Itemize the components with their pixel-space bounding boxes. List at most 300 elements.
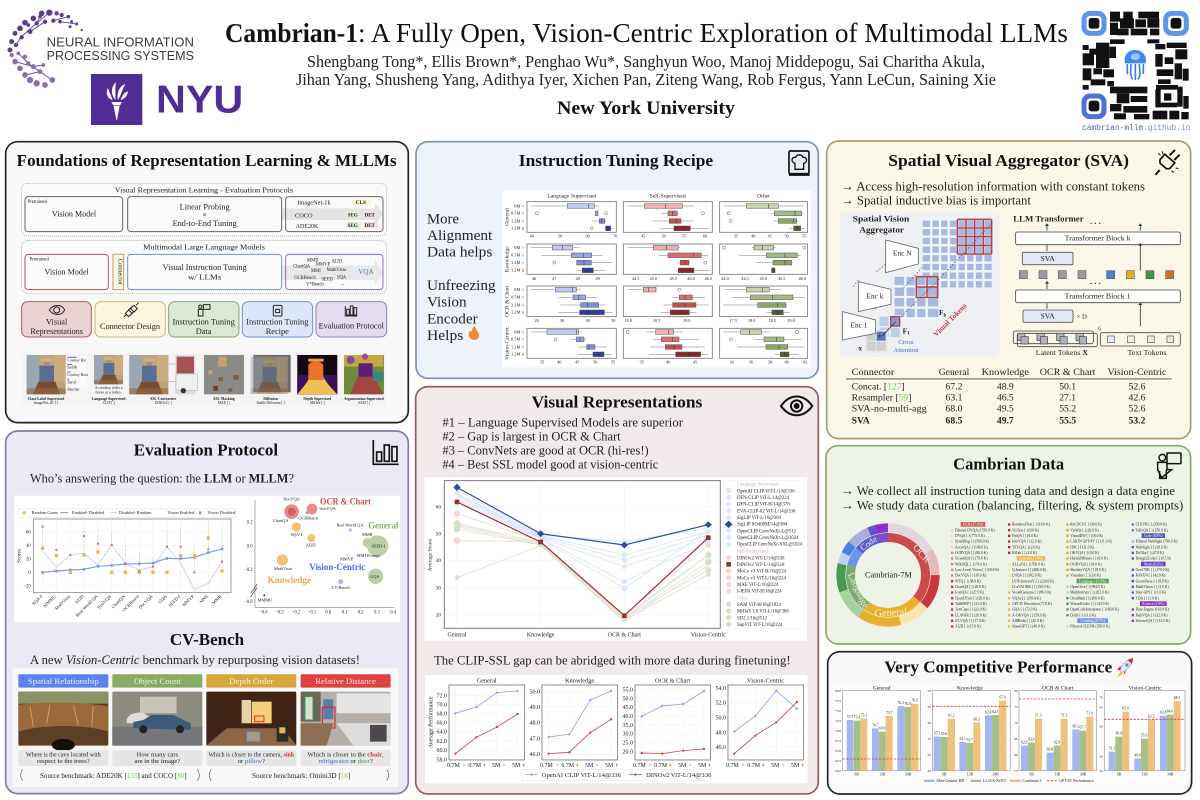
line charts: fine-tuning data scale: 0.7M xyxy=(654,763,668,769)
card: depth order: Which is closer to the camera, sink xyxy=(208,751,295,758)
line chart: average score by category: 20 xyxy=(436,612,441,618)
image strip: representation methods: Cowboy Hat xyxy=(67,358,86,362)
box plot grid: Self-Supervised xyxy=(650,192,686,199)
line chart: scores: MMVP xyxy=(182,594,196,608)
line chart: scores: MathVista xyxy=(54,595,72,612)
scatter plot: benchmarks: 0.2 xyxy=(247,521,253,526)
scatter plot: benchmarks: −0.8 xyxy=(244,600,253,605)
box plot grid: 1.2M xyxy=(511,268,520,273)
bar charts: performance by scale: 56.4 xyxy=(1115,732,1122,736)
diagram: spatial vision aggregator: k xyxy=(943,313,946,318)
legend column: general: InfoVQA [ ] (2.0 K) xyxy=(1012,540,1042,544)
box plot grid: 45.0 xyxy=(650,276,657,281)
box plot grid: 50 xyxy=(784,234,789,239)
text: question: Who’s answering the question: the LLM or MLLM? xyxy=(30,471,294,486)
text: cambrian bullets xyxy=(841,484,1183,512)
card: visual representations xyxy=(22,302,91,337)
icon: jellyfish xyxy=(1120,49,1150,80)
diagram: evaluation protocols: DET xyxy=(365,213,376,218)
chart legend: GPT-4V Performance xyxy=(1059,778,1094,783)
legend column: language and counting xyxy=(1066,523,1120,629)
scatter plot: benchmarks: MMB xyxy=(362,532,373,537)
legend column: general: General (21.9%) xyxy=(1019,557,1044,561)
bar charts: performance by scale: 60.2 xyxy=(973,717,980,721)
diagram: multimodal LLMs: Visual Instruction Tuning xyxy=(163,263,247,272)
icon: eye xyxy=(49,305,65,314)
panel: spatial visual aggregator xyxy=(827,141,1191,439)
scatter plot: benchmarks: 0.0 xyxy=(247,544,253,549)
legend column: OCR: DVQA [ ] (775.0 K) xyxy=(955,534,986,538)
heading: foundations: Foundations of Representation Learning & MLLMs xyxy=(17,151,397,170)
box plot grid: 45 xyxy=(641,234,645,239)
scatter plot: benchmarks: −0.2 xyxy=(244,568,253,573)
bar charts: performance by scale: 6B xyxy=(1030,772,1034,776)
line chart: scores: Vision Enabled xyxy=(167,510,195,515)
box plot grid: Other xyxy=(757,193,770,199)
bar charts: performance by scale: 76.3 xyxy=(897,701,904,705)
bar charts: performance by scale: 75.0 xyxy=(835,709,841,713)
line chart: scores: Enabled−Disabled xyxy=(72,510,105,515)
legend column: OCR: ScreenQA [ ] (79.0 K) xyxy=(955,557,988,561)
chart legend: MAE ViT-L/16@224 xyxy=(737,583,779,588)
diagram: evaluation protocols: SEG xyxy=(348,224,358,229)
diagram: multimodal LLMs: MMI xyxy=(311,269,321,274)
bar charts: performance by scale: 55.9 xyxy=(1141,734,1148,738)
card: instruction tuning recipe xyxy=(242,302,313,337)
diagram: multimodal LLMs: MMB xyxy=(307,259,318,264)
icon: plug xyxy=(1156,150,1180,175)
scatter plot: benchmarks: Knowledge xyxy=(268,575,311,585)
image strip: representation methods: MiDaS [ ] xyxy=(310,401,325,405)
heading: CV-Bench: CV-Bench xyxy=(170,630,244,649)
chart legend: SigLIP SO400M/14@384 xyxy=(737,523,788,528)
legend column: general: ShareGPT [ ] (40.0 K) xyxy=(1012,625,1045,629)
line chart: scores: −20 xyxy=(23,585,31,590)
legend column: OCR xyxy=(951,522,1000,629)
card: object count: Object Count xyxy=(134,676,181,686)
scatter plot: benchmarks: General xyxy=(368,521,399,531)
bar charts: performance by scale: 71.3 xyxy=(1061,714,1067,718)
box plot grid: 47 xyxy=(552,276,557,281)
scatter plot: benchmarks: OCRBench xyxy=(298,515,319,520)
legend column: code, math, science: DaTikz [ ] (47.0 K) xyxy=(1136,551,1165,555)
legend column: general xyxy=(1008,523,1055,629)
table: connector comparison: 63.1 xyxy=(946,392,963,403)
bar charts: performance by scale: 34B xyxy=(905,772,912,776)
card: visual representations: Representations xyxy=(30,327,83,336)
box plot grid: Vision-Centric xyxy=(505,326,511,360)
line chart: scores: GQA xyxy=(158,594,169,605)
box plot grid: 30 xyxy=(560,318,564,323)
scatter plot: benchmarks: SEED-I xyxy=(371,543,386,548)
diagram: LLM transformer: × D xyxy=(1077,313,1087,320)
chart: data donut xyxy=(841,528,935,622)
table: connector comparison: 50.1 xyxy=(1059,381,1076,392)
chart legend: SupViT ViT-L/16@224 xyxy=(737,623,783,628)
box plot grid xyxy=(503,191,811,367)
legend column: OCR: ArxivQA [ ] (100.0 K) xyxy=(955,545,989,549)
language boxes xyxy=(547,204,611,357)
table: connector comparison: OCR & Chart xyxy=(1040,367,1096,378)
legend column: general: ALLaVA [ ] (700.0 K) xyxy=(1012,562,1045,566)
line chart: scores: MMI xyxy=(199,594,210,605)
box plot grid: 18.5 xyxy=(653,318,660,323)
box plot grid: 45.5 xyxy=(670,276,677,281)
bar charts: performance by scale: 55.6 xyxy=(941,732,947,736)
title: : A Fully Open, Vision-Centric Exploration of Multimodal LLMs xyxy=(358,18,1068,48)
bar charts: performance by scale: 49.6 xyxy=(1134,753,1141,757)
chart legend: datasets xyxy=(951,522,1178,629)
legend column: OCR: AI2D [ ] (15.0 K) xyxy=(955,625,982,629)
chart legend: OpenCLIP ConvNeXt-L@512 xyxy=(737,529,797,534)
card: object count: How many cars xyxy=(136,751,179,758)
bar charts: performance by scale: 63.9 xyxy=(1028,738,1035,742)
image strip: representation methods: SAM [ ] xyxy=(358,401,370,405)
logo: NYU xyxy=(91,74,243,125)
chart legend: DINOv2 ViT-L/14@336 xyxy=(646,772,712,779)
line charts: fine-tuning data scale: 5M xyxy=(678,763,687,769)
text: source benchmarks: Source benchmark: Omini3D [18] xyxy=(252,771,350,780)
image strip: representation methods: horse at a rodeo. xyxy=(95,389,122,394)
text: key findings: #3 – ConvNets are good at OCR (hi-res!) xyxy=(442,442,649,457)
image strip: representation methods: Class-Label Supervised xyxy=(28,397,64,401)
authors xyxy=(296,52,996,89)
bar charts: performance by scale: 80 xyxy=(1014,689,1018,693)
logo: NeurIPS: PROCESSING SYSTEMS xyxy=(47,48,194,63)
line chart: scores: OCRBench xyxy=(122,594,141,613)
heading: cambrian data: Cambrian Data xyxy=(953,455,1065,474)
image strip: representation methods: ImageNet-1K [ ] xyxy=(34,401,58,405)
box plot grid: 40 xyxy=(585,318,590,323)
box plot grid: 0M xyxy=(514,329,520,334)
diagram: multimodal LLMs: V*Bench xyxy=(306,283,324,288)
diagram: LLM transformer: Text Tokens xyxy=(1127,348,1167,357)
bar charts: performance by scale: Knowledge xyxy=(957,685,984,691)
bar charts: performance by scale: 67.7 xyxy=(1079,726,1086,730)
line charts: fine-tuning data scale: 60.0 xyxy=(437,748,447,754)
line chart: scores xyxy=(17,509,236,619)
scatter plot: benchmarks: 0.4 xyxy=(390,610,397,615)
legend column: language and counting: LAION GPT-4V [ ] (11.0 K) xyxy=(1070,540,1113,544)
box plot grid: 40 xyxy=(751,234,755,239)
box plot grid: 1.2M xyxy=(511,310,520,315)
bar charts: performance by scale: 13B xyxy=(1054,772,1061,776)
bar charts: performance by scale: OCR & Chart xyxy=(1042,685,1074,691)
scatter plot: benchmarks: Vision-Centric xyxy=(309,562,365,572)
authors: Shengbang Tong*, Ellis Brown*, Penghao Wu*, Sanghyun Woo, Manoj Middepogu, Sai Charitha Akula, xyxy=(307,52,985,71)
diagram: spatial vision aggregator: x xyxy=(878,334,881,339)
icon: bar chart xyxy=(373,440,399,464)
line charts: fine-tuning data scale: 50.0 xyxy=(622,696,633,702)
legend column: language and counting: ReCOCO [ ] (30.0 K) xyxy=(1070,523,1103,527)
box plot grid: 46.5 xyxy=(705,276,712,281)
box plot grid: 1.2M xyxy=(511,302,520,307)
line chart: scores: 0 xyxy=(28,571,31,576)
box plot grid: 20 xyxy=(534,318,539,323)
diagram: spatial vision aggregator: F xyxy=(903,326,907,335)
box plot grid: Knowledge xyxy=(505,246,511,272)
box plot grid: 50 xyxy=(661,234,666,239)
box plot grid: 1.2M xyxy=(511,344,520,349)
line charts: fine-tuning data scale: 46.0 xyxy=(530,752,540,758)
line charts: fine-tuning data scale: OCR & Chart xyxy=(655,678,690,685)
box plot grid: 55 xyxy=(682,234,686,239)
chart: data donut: OCR xyxy=(910,542,932,566)
legend column: code, math, science: TQA [ ] (1.0 K) xyxy=(1136,596,1159,600)
scatter plot: benchmarks: ChartQA xyxy=(273,518,289,523)
chart legend: EVA-CLIP-02 ViT-L/14@336 xyxy=(737,509,796,514)
table: connector comparison: 52.6 xyxy=(1129,403,1146,414)
box plot grid: 40 xyxy=(529,234,534,239)
icon: connector xyxy=(124,303,139,317)
scatter plot: benchmarks: 0.1 xyxy=(342,610,348,615)
chart legend: DFN-CLIP ViT-L/14@224 xyxy=(737,496,790,501)
bar charts: performance by scale: 61.3 xyxy=(948,714,955,718)
image strip: representation methods: A cowboy rides a xyxy=(95,385,123,390)
legend column: code, math, science: CLEVR [ ] (350.0 K) xyxy=(1136,523,1168,527)
text: more alignment data helps: More xyxy=(427,211,459,227)
legend column: language and counting: Language (15.8%) xyxy=(1079,579,1107,583)
legend column: general: VisualGenome [ ] (86.0 K) xyxy=(1012,591,1052,595)
panel: instruction tuning recipe xyxy=(416,142,818,378)
legend column: general: AlIfRedit [ ] (45.0 K) xyxy=(1012,619,1044,623)
bar charts: performance by scale: 62.5 xyxy=(835,759,841,763)
line charts: fine-tuning data scale: 0.7M xyxy=(726,763,739,769)
legend column: language and counting: OODVQA [ ] (8.0 K) xyxy=(1070,562,1102,566)
legend column: OCR: WIkiSQL [ ] (74.0 K) xyxy=(955,562,988,566)
table: connector comparison: Knowledge xyxy=(982,367,1029,378)
logo: NYU: NYU xyxy=(156,78,243,122)
diagram: evaluation protocols: COCO xyxy=(295,212,313,219)
diagram: evaluation protocols: DET xyxy=(365,224,376,229)
diagram: evaluation protocols: ADE20K xyxy=(296,223,319,230)
line charts: fine-tuning data scale: 48.0 xyxy=(530,721,540,727)
text: SVA bullets xyxy=(841,180,1145,208)
scatter plot: benchmarks: MathVista xyxy=(274,566,292,571)
table: connector comparison: General xyxy=(939,367,970,378)
table: connector comparison: 53.2 xyxy=(1129,415,1146,426)
panel: visual representations xyxy=(416,387,818,794)
legend column: OCR: SynthDog [ ] (500.0 K) xyxy=(955,540,990,544)
icon: rocket xyxy=(1117,658,1133,677)
diagram: evaluation protocols: Pretrained xyxy=(28,200,47,205)
text: more alignment data helps: Alignment xyxy=(427,228,492,244)
bar charts: performance by scale: 69.9 xyxy=(879,727,886,731)
card: instruction tuning recipe: Instruction Tuning xyxy=(246,317,308,326)
bar charts: performance by scale: 65 xyxy=(1100,706,1103,710)
legend column: OCR: WTQ [ ] (38.0 K) xyxy=(955,579,982,583)
line charts: fine-tuning data scale: 49.0 xyxy=(530,705,540,711)
text: more alignment data helps xyxy=(427,211,493,261)
box plot grid: 35 xyxy=(734,234,738,239)
diagram: spatial vision aggregator: x xyxy=(858,344,862,353)
scatter plot: benchmarks: −0.3 xyxy=(275,610,284,615)
line chart: average score by category: 60 xyxy=(436,504,441,510)
diagram: multimodal LLMs: AI2D xyxy=(332,259,343,264)
image strip: representation methods: SSL-Masking xyxy=(213,397,235,401)
image strip: representation methods xyxy=(23,353,386,407)
legend column: language and counting: Dolly [ ] (11.0 K) xyxy=(1070,613,1097,617)
legend column: general: RenderedText [ ] (10.0 K) xyxy=(1012,523,1051,527)
card: instruction tuning data: Data xyxy=(196,327,212,336)
line charts: fine-tuning data scale: 68.0 xyxy=(437,712,447,718)
bar charts: performance by scale: 60 xyxy=(928,721,931,725)
icon: presenter xyxy=(1158,453,1181,478)
text: more alignment data helps: Data helps xyxy=(427,245,493,261)
legend column: general: LVIS-InstructV [ ] (220.0 K) xyxy=(1012,579,1055,583)
title: Cambrian-1 xyxy=(225,18,358,48)
scatter plot: benchmarks: SQA-I xyxy=(291,532,303,537)
other boxes xyxy=(741,204,802,357)
chart legend xyxy=(924,778,1094,783)
text: cambrian bullets: → We study data curation (balancing, filtering, & system prompts) xyxy=(841,498,1183,512)
bar charts: performance by scale: 54.1 xyxy=(959,737,966,741)
legend column: general: LNQA [ ] (302.0 K) xyxy=(1012,574,1042,578)
bar charts: performance by scale: 64.0 xyxy=(1167,710,1173,714)
table: connector comparison: 52.6 xyxy=(1129,381,1146,392)
bar charts: performance by scale: 6B xyxy=(942,772,947,776)
bar charts: performance by scale: 6B xyxy=(1117,772,1122,776)
legend column: code, math, science: GeomVerse [ ] (9.0 K) xyxy=(1136,579,1169,583)
diagram: multimodal LLMs: ... xyxy=(341,282,344,287)
chart legend xyxy=(522,769,712,781)
table: connector comparison: 42.6 xyxy=(1129,392,1146,403)
legend column: general: HiTab [ ] (2.0 K) xyxy=(1012,551,1038,555)
bar charts: performance by scale: 6B xyxy=(855,772,859,776)
diagram: LLM transformer xyxy=(1013,214,1180,357)
box plot grid: 60 xyxy=(703,234,707,239)
heading: SVA: Spatial Visual Aggregator (SVA) xyxy=(888,151,1129,170)
table: connector comparison: SVA xyxy=(852,415,870,426)
legend column: language and counting: VizWiz [ ] (20.0 K) xyxy=(1070,528,1100,532)
line charts: fine-tuning data scale: 30.0 xyxy=(622,732,633,738)
bar charts: performance by scale: General xyxy=(873,685,891,691)
text: CLIP-SSL gap: The CLIP-SSL gap can be abridged with more data during finetuning! xyxy=(434,652,791,667)
diagram: evaluation protocols: Linear Probing xyxy=(180,202,230,211)
diagram: multimodal LLMs: VQA xyxy=(358,268,374,276)
diagram: multimodal LLMs: Connector xyxy=(116,259,123,286)
bar charts: performance by scale: 71.9 xyxy=(1086,712,1093,716)
QR code: cambrian-mllm.github.io xyxy=(1082,123,1190,133)
legend column: OCR: LLAVAR [ ] (20.0 K) xyxy=(955,613,987,617)
box plot grid: 45 xyxy=(693,360,697,365)
box plot grid: 60 xyxy=(585,234,590,239)
chart legend: MoCo v3 ViT-L/16@224 xyxy=(737,576,787,581)
chart legend: DINOv2 ViT-L/14@518 xyxy=(737,563,785,568)
scatter plot: benchmarks: CV-Bench xyxy=(332,585,351,590)
box plot grid: 0.5M xyxy=(511,337,520,342)
line chart: average score by category: 30 xyxy=(436,585,441,591)
box plot grid: 46.0 xyxy=(799,276,806,281)
table: connector comparison: 46.5 xyxy=(997,392,1014,403)
legend column: OCR: TextCaps [ ] (22.0 K) xyxy=(955,608,987,612)
image strip: representation methods: Depth Supervised xyxy=(303,397,331,401)
icon: recipe book xyxy=(273,305,282,316)
legend column: code, math, science: RAVEN [ ] (42.0 K) xyxy=(1136,574,1166,578)
card: instruction tuning data xyxy=(169,302,239,337)
card: spatial relationship: Spatial Relationship xyxy=(28,676,99,686)
logo: NeurIPS xyxy=(8,10,194,87)
legend column: general: LLaVA158K [ ] (150.0 K) xyxy=(1012,585,1051,589)
line charts: fine-tuning data scale: 0.7M xyxy=(468,763,482,769)
legend column: general: A-OKVQA [ ] (50.0 K) xyxy=(1012,613,1047,617)
box plot grid: 1.2M xyxy=(511,218,520,223)
line charts: fine-tuning data scale: 40.0 xyxy=(622,714,633,720)
bar charts: performance by scale: 75 xyxy=(1014,705,1018,709)
box plot grid: 44.5 xyxy=(632,276,639,281)
line chart: scores: DocVQA xyxy=(138,594,155,611)
text: cambrian bullets: → We collect all instruction tuning data and design a data engine xyxy=(841,484,1175,498)
card: visual representations: Visual xyxy=(46,317,68,326)
image strip: representation methods: Segmentation Supervised xyxy=(344,397,384,401)
box plot grid: OCR & Chart xyxy=(505,285,511,317)
diagram: LLM transformer: SVA xyxy=(1040,254,1055,263)
line chart: average score by category: 40 xyxy=(436,558,441,564)
line charts: fine-tuning data scale: 46.0 xyxy=(715,745,726,751)
bar charts: performance by scale: 62.4 xyxy=(985,710,992,714)
scatter plot: benchmarks: OCR & Chart xyxy=(320,497,371,507)
box plot grid: 55 xyxy=(802,234,806,239)
heading: visual representations: Visual Representations xyxy=(532,392,703,411)
icon: eye xyxy=(781,396,812,415)
line charts: fine-tuning data scale: 5M xyxy=(605,763,614,769)
legend column: language and counting: HatefulMemes [ ] (8.0 K) xyxy=(1070,557,1109,561)
chart: data donut: Code xyxy=(858,534,879,553)
line charts: fine-tuning data scale: 25.0 xyxy=(622,741,633,747)
legend column: general: GPT4V Rewritten (77.0 K) xyxy=(1012,602,1053,606)
bar charts: performance by scale: 65.0 xyxy=(1122,707,1129,711)
box plot grid: 44.5 xyxy=(741,276,749,281)
text: source benchmarks xyxy=(21,769,389,781)
legend column: code, math, science: PathVQA [ ] (32.0 K) xyxy=(1136,613,1168,617)
line charts: fine-tuning data scale xyxy=(425,675,808,783)
legend column: code, math, science: ScienceQA [ ] (12.0 K) xyxy=(1136,619,1170,623)
scatter plot: benchmarks: MMI Prompt xyxy=(357,553,381,558)
self-supervised boxes xyxy=(643,204,701,357)
line chart: average score by category: Vision-Centric xyxy=(691,633,726,639)
diagram: spatial vision aggregator: Aggregator xyxy=(859,225,904,234)
box plot grid: 0M xyxy=(514,287,520,292)
box plot grid: 50 xyxy=(593,360,597,365)
bar charts: performance by scale xyxy=(832,683,1187,785)
chart panel background xyxy=(14,496,400,622)
legend column: language and counting: OpenCodeInterpreter [ ] (66.0 K) xyxy=(1070,608,1120,612)
chart legend: I-JEPA ViT-H/16@224 xyxy=(737,590,782,595)
bar charts: performance by scale: 51.3 xyxy=(1109,747,1115,751)
table: connector comparison: 67.2 xyxy=(946,381,963,392)
diagram: spatial vision aggregator: Enc k xyxy=(867,291,884,300)
bar charts: performance by scale: Vision-Centric xyxy=(1128,685,1162,691)
line charts: fine-tuning data scale: Knowledge xyxy=(565,678,594,685)
bar charts: performance by scale: 50 xyxy=(928,753,931,757)
box plot grid: 38 xyxy=(768,360,772,365)
box plot grid: 45.0 xyxy=(760,276,767,281)
diagram: spatial vision aggregator: Enc N xyxy=(893,249,912,258)
card: depth order: or pillow? xyxy=(238,758,265,765)
image strip: representation methods: CLIP [ ] xyxy=(103,401,115,405)
chart legend: MiDaS 3.0 ViT-L/16@384 xyxy=(737,610,789,615)
chart legend: OpenCLIP ConvNeXt-XXL@1024 xyxy=(737,543,803,548)
scatter plot: benchmarks: 0.3 xyxy=(374,610,381,615)
box plot grid: 40 xyxy=(557,360,561,365)
bar charts: performance by scale: 50 xyxy=(1100,755,1103,759)
bar charts: performance by scale: 45 xyxy=(1100,769,1103,773)
scatter plot: benchmarks: GQA xyxy=(370,574,381,579)
table: connector comparison xyxy=(846,367,1172,426)
box plot grid: 19.0 xyxy=(787,318,795,323)
line charts: fine-tuning data scale: 0.7M xyxy=(747,763,761,769)
chart legend: OpenAI CLIP ViT-L/14@336 xyxy=(737,489,795,494)
